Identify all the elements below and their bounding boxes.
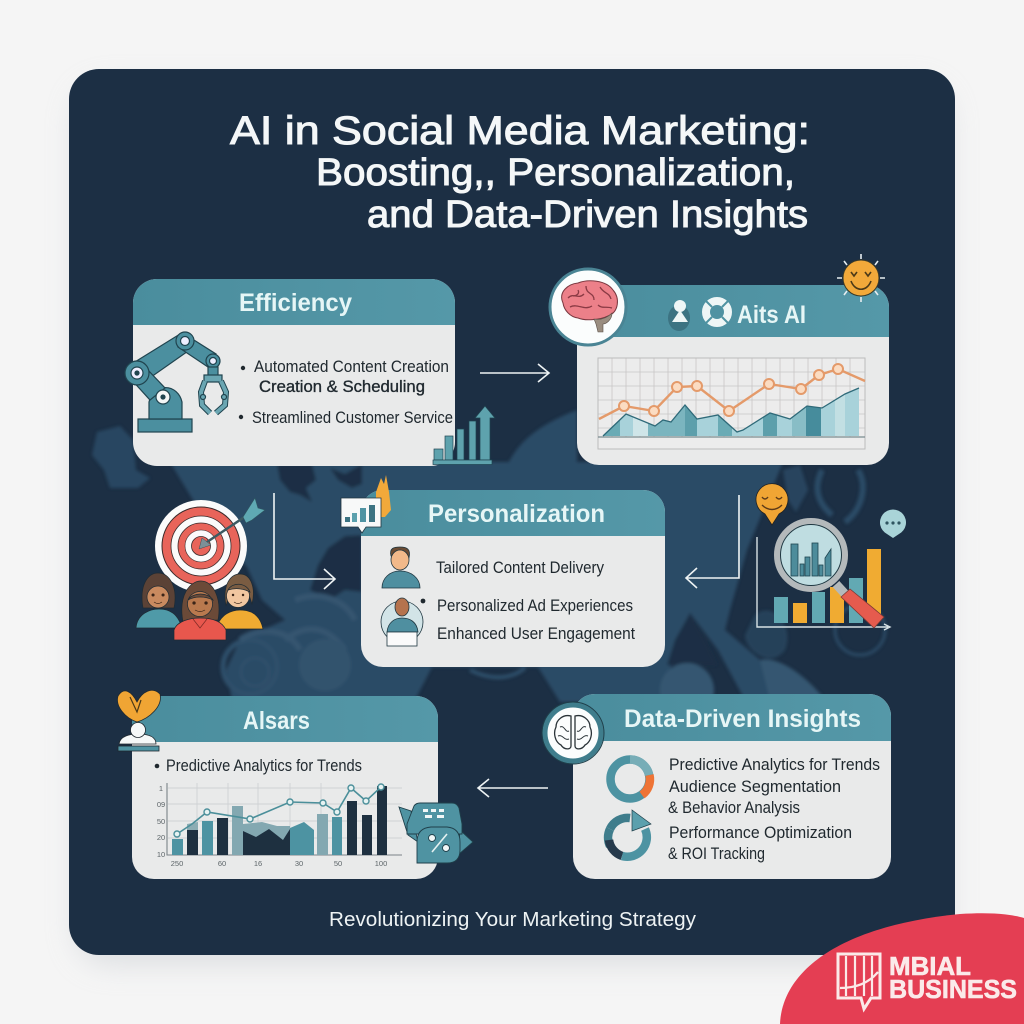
icon: robot arm — [125, 332, 226, 432]
icon: lifebuoy — [705, 300, 729, 324]
text: personalization bullets — [421, 559, 635, 643]
panel: data-driven insights — [542, 694, 891, 879]
chart: bars and line: 250 — [171, 859, 183, 868]
icon: small robot — [668, 300, 690, 331]
title: and Data-Driven Insights — [367, 194, 808, 236]
icon group: target and people — [136, 498, 265, 640]
arrow: elbow to personalization — [274, 493, 335, 589]
icon: smiling sun — [837, 254, 885, 302]
chart: bars and line: 09 — [157, 800, 165, 809]
icon: brain badge — [550, 269, 626, 345]
panel: AI chart — [550, 254, 889, 465]
background world map — [92, 410, 885, 717]
text: personalization bullets: Tailored Content Delivery — [436, 559, 605, 577]
arrow: elbow from analysis to personalization — [686, 495, 739, 588]
chart: bars and line: 10 — [157, 850, 165, 859]
icon: brain line badge — [542, 702, 604, 764]
icon: teapot discount — [399, 803, 473, 863]
icon: donut chart one — [610, 760, 650, 798]
icon: flame — [376, 475, 391, 517]
text: predictive analytics: Predictive Analytics for Trends — [166, 757, 362, 775]
chart: bars and line: 1 — [159, 784, 163, 793]
chart: bars and line: 60 — [218, 859, 226, 868]
heading: personalization: Personalization — [428, 500, 605, 528]
panel: personalization — [341, 475, 665, 667]
panel: efficiency — [125, 279, 495, 466]
footer tagline: Revolutionizing Your Marketing Strategy — [329, 909, 696, 931]
icon: donut chart two — [608, 810, 651, 857]
title — [230, 109, 810, 236]
text: insights list — [668, 756, 880, 863]
chart axes — [757, 537, 890, 630]
icon: person left — [136, 573, 182, 628]
text: efficiency bullets — [239, 358, 453, 427]
chart: bars and line: 50 — [157, 817, 165, 826]
icon: logo chart bubble — [838, 954, 880, 1009]
heading: Aits AI: Aits AI — [737, 301, 806, 329]
logo wordmark: MBIAL — [889, 951, 971, 981]
text: efficiency bullets: Automated Content Creation — [254, 358, 449, 376]
icon: person centre — [174, 581, 226, 640]
logo wordmark: BUSINESS — [889, 974, 1017, 1004]
chart: orange line over teal area — [598, 358, 865, 449]
icon: person right — [216, 574, 263, 629]
chart bars — [774, 549, 881, 623]
logo wordmark — [889, 951, 1017, 1004]
icon: growth bars — [433, 406, 495, 464]
text: insights list: Performance Optimization — [669, 824, 852, 842]
icon: person at laptop — [381, 598, 423, 646]
text: insights list: Predictive Analytics for Trends — [669, 756, 880, 774]
icon: target — [155, 500, 247, 592]
arrow: efficiency to AI — [480, 364, 549, 382]
arrow: insights to alsars — [478, 779, 548, 797]
icon: magnifier — [777, 521, 884, 628]
chart: bars and line: 16 — [254, 859, 262, 868]
chart: bars and line: 20 — [157, 833, 165, 842]
heading: alsars: Alsars — [243, 707, 310, 735]
text: insights list: Audience Segmentation — [669, 778, 841, 796]
icon group: analysis bar chart — [756, 484, 906, 630]
heading: efficiency: Efficiency — [239, 289, 352, 317]
text: personalization bullets: Enhanced User Engagement — [437, 625, 635, 643]
logo badge — [780, 913, 1024, 1024]
chart: bars and line — [157, 783, 402, 868]
main dark panel — [69, 69, 955, 965]
icon: chat bubble — [880, 509, 906, 538]
icon: presenter with idea — [117, 690, 160, 751]
icon: chart bubble — [341, 498, 381, 533]
title: Boosting,, Personalization, — [316, 152, 795, 194]
title: AI in Social Media Marketing: — [230, 109, 810, 153]
icon: arrow in target — [199, 498, 265, 549]
heading: data-driven insights: Data-Driven Insights — [624, 705, 861, 733]
text: personalization bullets: Personalized Ad Experiences — [437, 597, 633, 615]
text: insights list: & ROI Tracking — [668, 845, 765, 863]
text: efficiency bullets: Creation & Scheduling — [259, 377, 425, 396]
chart: bars and line: 100 — [375, 859, 387, 868]
chart: bars and line: 30 — [295, 859, 303, 868]
text: efficiency bullets: Streamlined Customer Service — [252, 409, 453, 427]
chart: bars and line: 50 — [334, 859, 342, 868]
icon: face bubble — [756, 484, 788, 525]
text: insights list: & Behavior Analysis — [668, 799, 800, 817]
icon: person with shirt — [382, 547, 420, 588]
panel: alsars — [117, 690, 473, 879]
